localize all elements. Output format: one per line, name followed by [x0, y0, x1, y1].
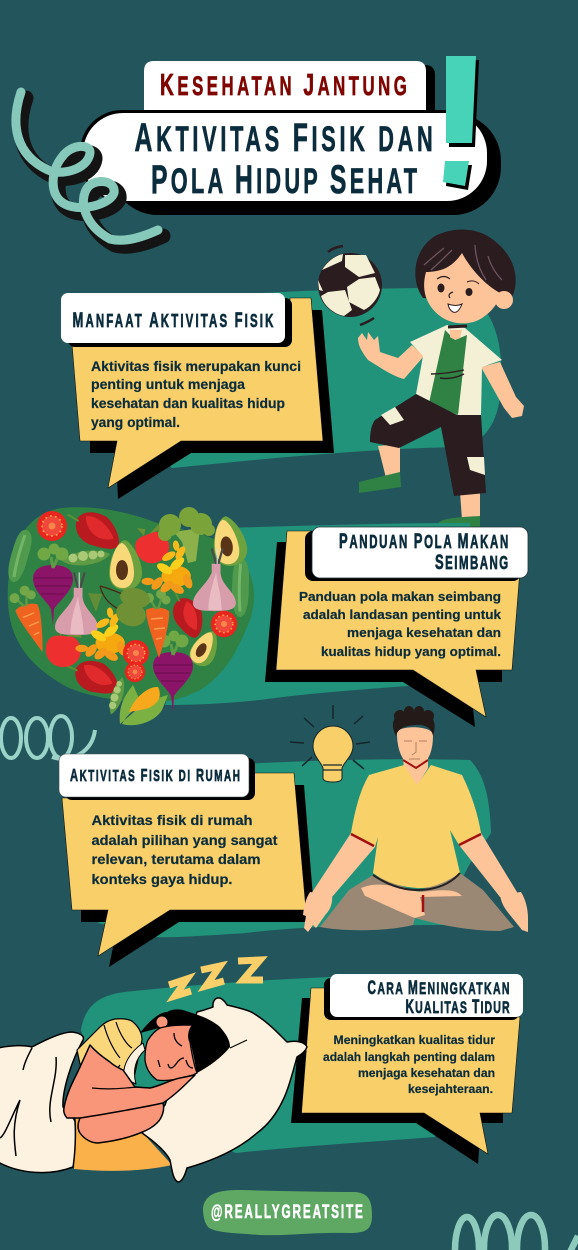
illustration: boy with football: [318, 230, 524, 528]
body text: Meningkatkan kualitas tidur: [334, 1035, 496, 1047]
body text: kesehatan dan kualitas hidup: [91, 396, 285, 411]
football: [318, 246, 382, 325]
hair: [415, 230, 516, 300]
teal blob: [140, 288, 501, 468]
head: [495, 291, 513, 309]
body text: kesejahteraan.: [408, 1084, 493, 1096]
lower arm: [78, 1103, 164, 1143]
green heart: [8, 507, 254, 703]
heading: aktivitas fisik di rumah: AKTIVITAS FISIK DI RUMAH: [70, 765, 240, 786]
speech bubble shadow: [81, 785, 315, 967]
blanket: [0, 1032, 83, 1173]
title block: [16, 56, 501, 246]
teal blob: [98, 759, 491, 937]
trousers: [320, 873, 514, 931]
pillow: [142, 998, 307, 1182]
title pill: AKTIVITAS FISIK DAN: [134, 116, 433, 161]
icon: z z z: [169, 960, 263, 996]
heading: manfaat aktivitas fisik: [61, 293, 292, 347]
heading: panduan pola makan seimbang: SEIMBANG: [435, 550, 508, 574]
teal blob: [165, 523, 474, 705]
shirt: [410, 325, 502, 415]
illustration: vegetable heart: [7, 507, 258, 725]
body text: [92, 812, 278, 887]
heading: cara meningkatkan kualitas tidur: CARA MENINGKATKAN: [368, 978, 509, 999]
speech bubble shadow: [90, 310, 334, 499]
heading: cara meningkatkan kualitas tidur: KUALITAS TIDUR: [406, 997, 510, 1018]
title pill: POLA HIDUP SEHAT: [151, 158, 417, 203]
arms: [309, 833, 520, 897]
panel: aktivitas fisik di rumah: [59, 705, 528, 967]
body text: [91, 359, 301, 430]
olives: [88, 585, 152, 630]
hair: [393, 706, 435, 736]
body text: adalah pilihan yang sangat: [92, 832, 278, 848]
body text: [323, 1035, 496, 1096]
striped top: [77, 1019, 142, 1087]
hair: [140, 1009, 230, 1073]
speech bubble shadow: [291, 998, 503, 1164]
body text: [299, 589, 502, 659]
heading: panduan pola makan seimbang: [305, 527, 528, 581]
body text: menjaga kesehatan dan: [347, 625, 501, 640]
body text: yang optimal.: [91, 415, 180, 430]
collar: [124, 1043, 145, 1084]
speech bubble: [72, 298, 323, 488]
panel: cara meningkatkan kualitas tidur: [0, 960, 523, 1182]
icon: light bulb: [290, 705, 370, 782]
teal blob: [81, 977, 440, 1153]
body text: Aktivitas fisik merupakan kunci: [91, 359, 301, 374]
illustration: man meditating: [303, 706, 528, 932]
face: [437, 276, 479, 284]
hands: [303, 892, 528, 932]
body text: Panduan pola makan seimbang: [299, 589, 501, 604]
body text: relevan, terutama dalam: [92, 851, 260, 867]
speech bubble: [276, 531, 520, 717]
body text: kualitas hidup yang optimal.: [321, 644, 501, 659]
heading: cara meningkatkan kualitas tidur: [324, 974, 523, 1020]
speech bubble shadow: [265, 542, 502, 727]
heading: panduan pola makan seimbang: PANDUAN POLA MAKAN: [339, 529, 508, 553]
title tab: Kesehatan Jantung: KESEHATAN JANTUNG: [160, 69, 407, 102]
shirt: [351, 765, 481, 888]
panel: panduan pola makan seimbang: [7, 507, 528, 727]
decoration: spiral left: [1, 716, 95, 759]
crossed feet: [361, 885, 462, 918]
body text: konteks gaya hidup.: [92, 871, 232, 887]
body text: adalah landasan penting untuk: [303, 607, 502, 622]
arms: [358, 332, 524, 418]
decoration: spiral bottom right: [455, 1215, 578, 1250]
panel: manfaat aktivitas fisik: [61, 230, 524, 528]
heading: manfaat aktivitas fisik: MANFAAT AKTIVITAS FISIK: [72, 308, 273, 332]
shorts: [370, 394, 486, 496]
neck and face: [402, 750, 428, 786]
icon: curly ribbon: [16, 92, 163, 246]
upper arm: [64, 1045, 195, 1118]
corn: [120, 685, 168, 725]
body text: adalah langkah penting dalam: [323, 1052, 495, 1064]
heading: aktivitas fisik di rumah: [59, 754, 255, 800]
speech bubble: [302, 988, 520, 1154]
broccoli: [158, 507, 215, 563]
body text: menjaga kesehatan dan: [358, 1068, 495, 1080]
footer handle badge: @REALLYGREATSITE: [211, 1202, 363, 1223]
body text: penting untuk menjaga: [91, 377, 246, 392]
illustration: person sleeping: [0, 998, 307, 1182]
body text: Aktivitas fisik di rumah: [92, 812, 252, 828]
face: [145, 1025, 197, 1081]
footer handle badge: [203, 1190, 372, 1235]
title tab: Kesehatan Jantung: [144, 61, 435, 116]
title pill: [80, 110, 501, 215]
orange body: [74, 1118, 172, 1171]
icon: exclamation mark: [443, 56, 479, 190]
legs and shoes: [378, 444, 480, 520]
speech bubble: [62, 773, 306, 956]
